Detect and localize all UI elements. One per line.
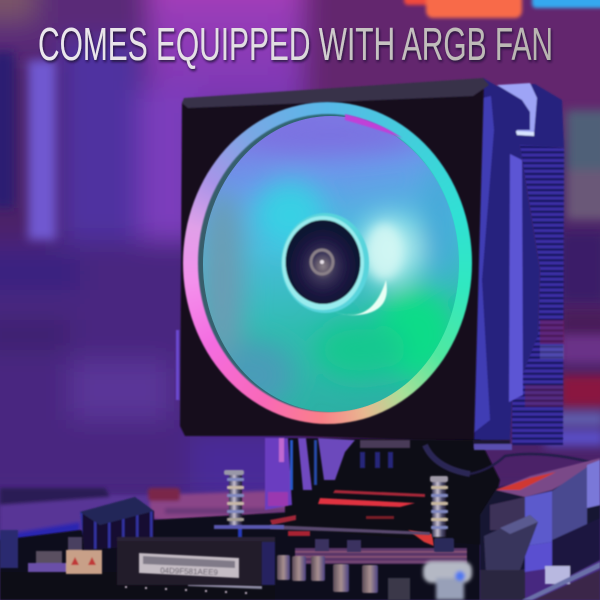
bracket line and cables	[270, 440, 590, 564]
light side panel	[509, 154, 523, 402]
serial number: 04D9F581AEE9	[160, 566, 219, 577]
barcode label	[139, 553, 239, 578]
spring screw right	[430, 476, 454, 552]
red reflection strips	[270, 490, 434, 546]
large white connector	[423, 561, 472, 600]
ring inner gap	[198, 114, 458, 412]
heatpipes	[265, 438, 410, 510]
light front strip	[472, 96, 494, 434]
CPU cooler	[175, 77, 565, 446]
black module	[117, 537, 275, 585]
blurred background board	[0, 488, 292, 545]
heatsink fins	[512, 140, 564, 445]
fan blades and hub	[203, 113, 459, 412]
top cap highlight	[497, 83, 537, 134]
argb ring	[183, 102, 472, 424]
capacitors	[277, 539, 410, 600]
small parts left	[0, 530, 262, 594]
hub glow crescent	[335, 280, 387, 315]
RAM modules	[480, 458, 600, 600]
side shroud	[472, 78, 564, 442]
spring screw left	[214, 470, 284, 541]
magenta highlight on fan top	[345, 114, 402, 138]
front frame	[176, 78, 489, 442]
VRM heatsink	[80, 497, 154, 550]
lights: orange and cyan top right	[404, 0, 600, 18]
hub	[286, 220, 360, 304]
board surface	[0, 438, 500, 600]
